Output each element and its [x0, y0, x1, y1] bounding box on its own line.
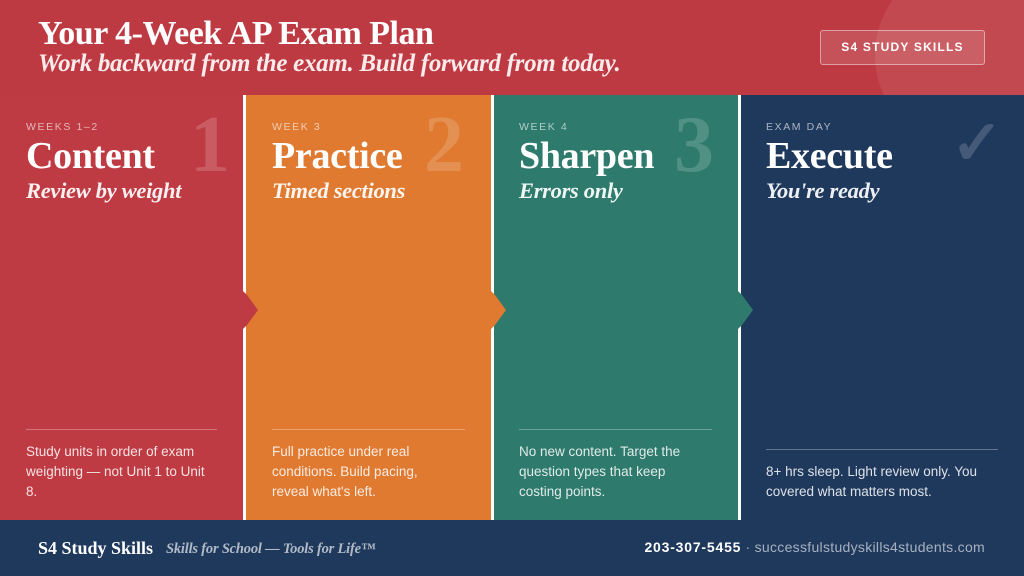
panel: sharpen: WEEK 4 — [519, 121, 568, 133]
panel: execute: EXAM DAY — [766, 121, 832, 133]
subtitle: Work backward from the exam. Build forward from today. — [38, 50, 620, 77]
footer brand: S4 Study Skills — [38, 538, 153, 558]
panel: sharpen: Sharpen — [519, 135, 654, 177]
panel: execute: You're ready — [766, 178, 879, 203]
panel: content: Study units in order of exam weighting — not Unit 1 to Unit 8. — [26, 444, 205, 499]
badge — [820, 30, 985, 65]
arrow 1 — [240, 288, 258, 332]
footer — [0, 520, 1024, 576]
header band — [0, 0, 1024, 95]
arrow 3 — [735, 288, 753, 332]
panel: practice: Practice — [272, 135, 402, 177]
panel: practice: Full practice under real conditions. Build pacing, reveal what's left. — [272, 444, 418, 499]
panel: practice: Timed sections — [272, 178, 405, 203]
panel: content: 1 — [190, 101, 230, 189]
panel: execute: 8+ hrs sleep. Light review only. You covered what matters most. — [766, 464, 977, 499]
columns background — [0, 95, 1024, 520]
title: Your 4-Week AP Exam Plan — [38, 15, 433, 52]
panel: content: Review by weight — [26, 178, 181, 203]
panel: sharpen: No new content. Target the question types that keep costing points. — [519, 444, 680, 499]
panel: execute — [766, 110, 1003, 499]
panel: execute: ✓ — [951, 110, 1003, 178]
badge: S4 STUDY SKILLS — [841, 40, 964, 54]
panel: practice: 2 — [424, 101, 464, 189]
panel: practice — [272, 101, 465, 499]
panel: practice: WEEK 3 — [272, 121, 321, 133]
footer tagline: Skills for School — Tools for Life™ — [166, 541, 375, 557]
panel: content: Content — [26, 135, 155, 177]
panel: content: WEEKS 1–2 — [26, 121, 99, 133]
footer contact: 203-307-5455 · successfulstudyskills4students.com — [644, 539, 985, 555]
panel: content — [26, 101, 230, 499]
panel: sharpen: Errors only — [519, 178, 623, 203]
arrow 2 — [488, 288, 506, 332]
panel: sharpen — [518, 101, 714, 499]
panel: execute: Execute — [766, 135, 893, 177]
panel: sharpen: 3 — [674, 101, 714, 189]
